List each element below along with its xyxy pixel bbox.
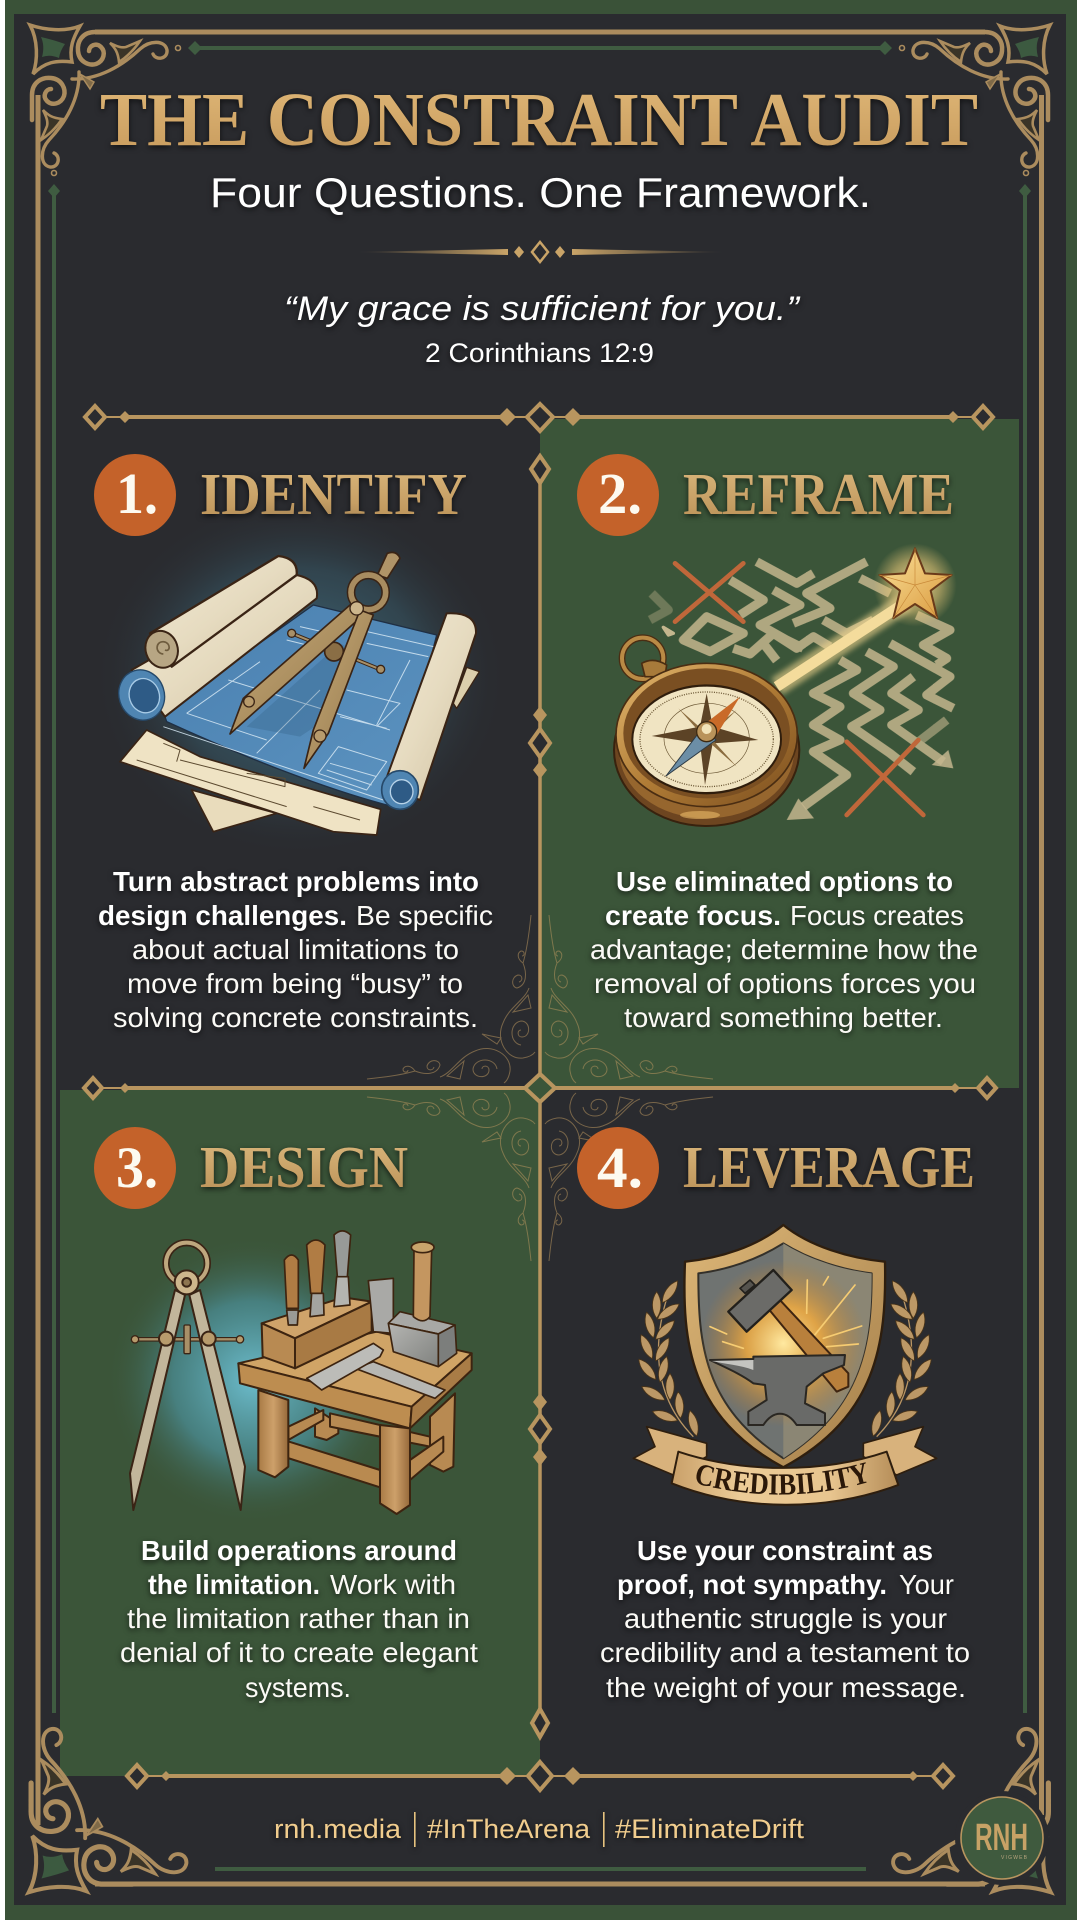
step 1 description: move from being “busy” to xyxy=(127,968,463,999)
decorative divider xyxy=(355,242,726,262)
subtitle: Four Questions. One Framework. xyxy=(210,169,871,216)
step 1 description: Be specific xyxy=(356,900,493,931)
step 4 description: authentic struggle is your xyxy=(624,1603,947,1634)
step 3 description: Work with xyxy=(330,1569,456,1600)
icon: dividers and workbench with tools xyxy=(107,1231,472,1523)
step 4 description xyxy=(600,1535,970,1703)
step 4 description: proof, not sympathy. xyxy=(617,1569,887,1600)
step 4 badge: 4. xyxy=(597,1135,643,1200)
scripture reference: 2 Corinthians 12:9 xyxy=(425,338,654,368)
footer links and hashtags: #InTheArena xyxy=(427,1814,591,1844)
step 3 badge: 3. xyxy=(116,1135,158,1200)
step 2 badge xyxy=(577,454,659,536)
step 1 description: Turn abstract problems into xyxy=(113,866,479,897)
step 1 badge: 1. xyxy=(116,461,158,526)
step 2 heading: REFRAME xyxy=(683,461,954,527)
step 4 description: the weight of your message. xyxy=(606,1672,966,1703)
icon: compass, maze and star xyxy=(614,543,957,826)
step 2 description: Focus creates xyxy=(790,900,964,931)
icon: credibility shield with hammer and anvil xyxy=(632,1224,938,1506)
step 3 description: the limitation. xyxy=(148,1569,320,1600)
step 4 heading: LEVERAGE xyxy=(683,1134,975,1200)
step 2 description: create focus. xyxy=(605,900,781,931)
scripture quote: “My grace is sufficient for you.” xyxy=(284,290,801,328)
logo badge xyxy=(955,1791,1049,1885)
step 3 description: the limitation rather than in xyxy=(127,1603,470,1634)
logo badge: VIGWEB xyxy=(1001,1855,1028,1861)
step 2 description: Use eliminated options to xyxy=(616,866,953,897)
center flourishes xyxy=(367,915,713,1261)
step 1 heading: IDENTIFY xyxy=(200,461,467,527)
step 3 description: systems. xyxy=(245,1672,351,1703)
step 2 description: toward something better. xyxy=(624,1002,943,1033)
step 4 description: credibility and a testament to xyxy=(600,1637,970,1668)
step 4 description: Use your constraint as xyxy=(637,1535,933,1566)
footer links and hashtags: rnh.media xyxy=(274,1814,402,1844)
step 3 badge xyxy=(94,1127,176,1209)
step 1 description: solving concrete constraints. xyxy=(113,1002,478,1033)
icon: credibility shield with hammer and anvil: CREDIBILITY xyxy=(696,1462,866,1495)
icon: blueprint, rolls and dividers xyxy=(93,497,507,857)
footer links and hashtags: #EliminateDrift xyxy=(615,1814,805,1844)
panel: design background xyxy=(60,1090,540,1776)
step 1 description xyxy=(98,866,493,1033)
step 2 description: removal of options forces you xyxy=(594,968,976,999)
step 3 description xyxy=(120,1535,478,1703)
step 2 description: advantage; determine how the xyxy=(590,934,978,965)
footer links and hashtags xyxy=(274,1812,805,1847)
step 3 heading: DESIGN xyxy=(200,1134,408,1200)
step 2 description xyxy=(590,866,978,1033)
grid lines and diamonds xyxy=(84,404,996,1790)
step 1 description: design challenges. xyxy=(98,900,347,931)
step 4 description: Your xyxy=(899,1569,954,1600)
step 1 badge xyxy=(94,454,176,536)
step 3 description: Build operations around xyxy=(141,1535,457,1566)
panel: reframe background xyxy=(540,419,1019,1088)
step 4 badge xyxy=(577,1127,659,1209)
step 3 description: denial of it to create elegant xyxy=(120,1637,478,1668)
step 2 badge: 2. xyxy=(598,461,642,526)
logo badge: RNH xyxy=(975,1817,1028,1859)
title: THE CONSTRAINT AUDIT xyxy=(100,78,978,162)
step 1 description: about actual limitations to xyxy=(132,934,459,965)
